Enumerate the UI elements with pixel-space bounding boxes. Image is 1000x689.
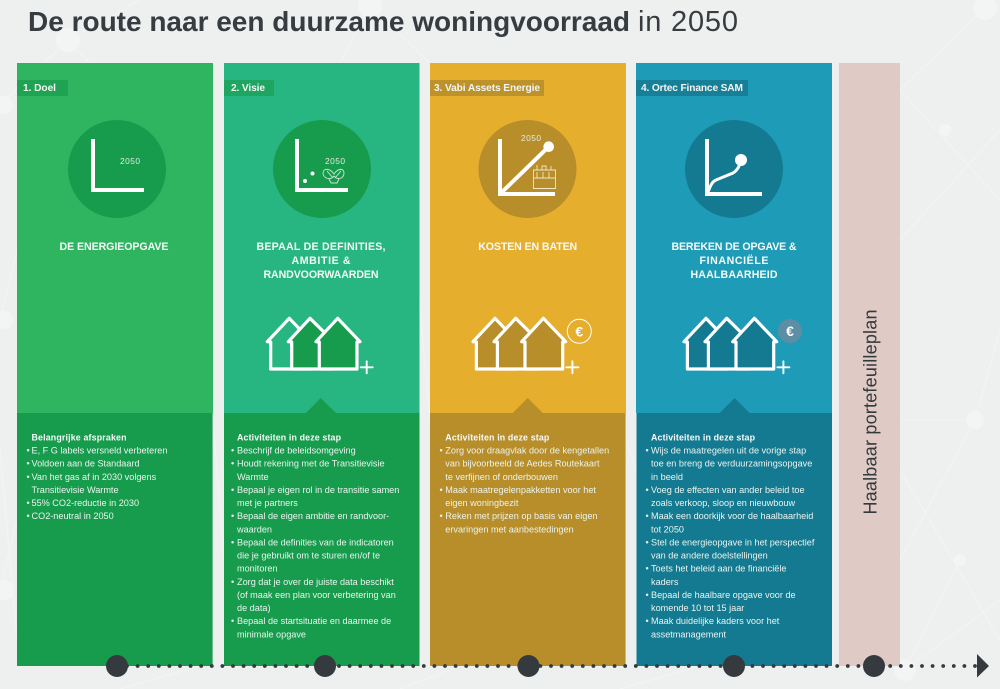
text block: activiteiten stap 4: toe en breng de verduurzamingsopgave (651, 459, 812, 469)
text block: activiteiten stap 2: Bepaal je eigen rol in de transitie samen (237, 485, 399, 495)
pointer triangle (720, 398, 750, 413)
timeline with milestones and arrow (106, 654, 989, 678)
text block: belangrijke afspraken: Van het gas af in 2030 volgens (32, 472, 157, 482)
text block: activiteiten stap 2: Bepaal de startsituatie en daarmee de (237, 616, 391, 626)
text block: belangrijke afspraken: Transitievisie Warmte (32, 485, 119, 495)
title: De route naar een duurzame woningvoorraad (28, 6, 630, 37)
heading: bereken: BEREKEN DE OPGAVE & (672, 241, 797, 253)
text block: activiteiten stap 3: Maak maatregelenpakketten voor het (445, 485, 596, 495)
icon: chart with dots and bow 2050 (273, 120, 371, 218)
text block: belangrijke afspraken (26, 432, 167, 521)
tag: 2. Visie: 2. Visie (231, 83, 265, 94)
text block: activiteiten stap 3: Reken met prijzen op basis van eigen (445, 511, 597, 521)
text block: activiteiten stap 3: te verfijnen of onderbouwen (445, 472, 558, 482)
text block: activiteiten stap 2: • (231, 511, 234, 521)
text block: activiteiten stap 4: Activiteiten in deze stap (651, 432, 756, 442)
panel: 1. Doel (17, 63, 213, 666)
text block: belangrijke afspraken: CO2-neutral in 2050 (32, 511, 114, 521)
text block: activiteiten stap 2: die je gebruikt om te sturen en/of te (237, 551, 380, 561)
text block: activiteiten stap 4: • (646, 446, 649, 456)
tag: 4. Ortec Finance SAM: 4. Ortec Finance SAM (641, 83, 743, 94)
text block: activiteiten stap 4: Stel de energieopgave in het perspectief (651, 538, 815, 548)
tag: 3. Vabi Assets Energie (430, 80, 544, 96)
heading: definities: RANDVOORWAARDEN (264, 269, 378, 281)
tag: 1. Doel (17, 80, 68, 96)
text block: activiteiten stap 4: • (646, 616, 649, 626)
text block: activiteiten stap 2: Bepaal de eigen ambitie en randvoor- (237, 511, 389, 521)
panel: 2. Visie (224, 63, 420, 666)
text block: activiteiten stap 4: Voeg de effecten van ander beleid toe (651, 485, 805, 495)
text block: activiteiten stap 4: van de andere doelstellingen (651, 551, 768, 561)
panel: Haalbaar portefeuilleplan: Haalbaar portefeuilleplan (860, 310, 880, 514)
text block: activiteiten stap 4 (646, 432, 815, 639)
text block: activiteiten stap 3: Activiteiten in deze stap (445, 432, 550, 442)
text block: activiteiten stap 2: waarden (236, 524, 272, 534)
text block: activiteiten stap 3: Zorg voor draagvlak door de kengetallen (445, 446, 609, 456)
icon: curved chart (685, 120, 783, 218)
text block: activiteiten stap 3: • (440, 446, 443, 456)
text block: activiteiten stap 2: (of maak een plan voor verbetering van (237, 590, 396, 600)
text block: belangrijke afspraken: 55% CO2-reductie in 2030 (32, 498, 139, 508)
text block: activiteiten stap 4: • (646, 590, 649, 600)
text block: activiteiten stap 2: de data) (237, 603, 270, 613)
text block: activiteiten stap 2: • (231, 577, 234, 587)
heading: bereken: FINANCIËLE (700, 254, 768, 267)
text block: activiteiten stap 2: met je partners (237, 498, 298, 508)
pointer triangle (306, 398, 336, 413)
text block: belangrijke afspraken: • (26, 498, 30, 508)
text block: activiteiten stap 4: Bepaal de haalbare opgave voor de (651, 590, 796, 600)
text block: activiteiten stap 4: in beeld (651, 472, 683, 482)
text block: activiteiten stap 2 (231, 432, 399, 639)
text block: activiteiten stap 2: Bepaal de definities van de indicatoren (237, 538, 394, 548)
text block: belangrijke afspraken: Belangrijke afspraken (32, 432, 126, 442)
pointer triangle (513, 398, 543, 413)
text block: activiteiten stap 3: ervaringen met aanbestedingen (445, 524, 574, 534)
text block: activiteiten stap 3 (440, 432, 609, 534)
text block: belangrijke afspraken: E, F G labels versneld verbeteren (32, 446, 167, 456)
text block: belangrijke afspraken: • (26, 472, 30, 482)
icon: houses plus euro badge (684, 318, 802, 373)
text block: activiteiten stap 2: Activiteiten in deze stap (237, 432, 342, 442)
icon: houses plus euro: € (575, 324, 583, 340)
text block: activiteiten stap 4: Toets het beleid aan de financiële (651, 564, 786, 574)
text block: activiteiten stap 4: komende 10 tot 15 jaar (651, 603, 744, 613)
panel: 4. Ortec Finance SAM (636, 63, 832, 666)
text block: activiteiten stap 3: van bijvoorbeeld de Aedes Routekaart (445, 459, 600, 469)
icon: houses plus euro (473, 318, 591, 373)
text block: belangrijke afspraken: Voldoen aan de Standaard (32, 459, 140, 469)
text block: activiteiten stap 2: Zorg dat je over de juiste data beschikt (237, 577, 394, 587)
text block: activiteiten stap 4: • (646, 511, 649, 521)
icon: empty chart 2050 (68, 120, 166, 218)
text block: activiteiten stap 2: monitoren (237, 564, 278, 574)
text block: activiteiten stap 4: • (646, 564, 649, 574)
title: in 2050 (638, 6, 738, 38)
text block: activiteiten stap 2: Houdt rekening met de Transitievisie (237, 459, 385, 469)
icon: rising chart with toolbox: 2050 (521, 133, 541, 143)
text block: belangrijke afspraken: • (26, 446, 30, 456)
text block: activiteiten stap 4: Wijs de maatregelen uit de vorige stap (651, 446, 806, 456)
text block: activiteiten stap 4: • (646, 538, 649, 548)
panel: Haalbaar portefeuilleplan (839, 63, 900, 666)
icon: empty chart 2050: 2050 (120, 156, 140, 166)
heading: De energieopgave: DE ENERGIEOPGAVE (60, 241, 168, 253)
text block: activiteiten stap 3: eigen woningbezit (445, 498, 519, 508)
panel: 3. Vabi Assets Energie (430, 63, 626, 666)
text block: activiteiten stap 4: assetmanagement (651, 629, 727, 639)
heading: kosten en baten: KOSTEN EN BATEN (478, 241, 577, 253)
heading: definities: AMBITIE & (292, 255, 351, 267)
text block: activiteiten stap 4: tot 2050 (651, 524, 684, 534)
tag: 1. Doel: 1. Doel (23, 83, 56, 94)
text block: activiteiten stap 2: minimale opgave (237, 629, 306, 639)
text block: activiteiten stap 3: • (440, 485, 443, 495)
text block: activiteiten stap 2: • (231, 538, 234, 548)
text block: activiteiten stap 2: Beschrijf de beleidsomgeving (237, 446, 356, 456)
text block: activiteiten stap 4: Maak duidelijke kaders voor het (651, 616, 780, 626)
heading: bereken: HAALBAARHEID (690, 269, 778, 281)
icon: rising chart with toolbox (478, 120, 576, 218)
text block: activiteiten stap 2: • (231, 485, 234, 495)
text block: activiteiten stap 4: zoals verkoop, sloop en nieuwbouw (651, 498, 795, 508)
text block: belangrijke afspraken: • (26, 511, 30, 521)
tag: 4. Ortec Finance SAM (636, 80, 748, 96)
text block: activiteiten stap 3: • (440, 511, 443, 521)
heading: bereken (672, 241, 797, 281)
icon: chart with dots and bow 2050: 2050 (325, 156, 345, 166)
icon: houses plus euro badge: € (786, 323, 794, 339)
text block: activiteiten stap 2: • (231, 446, 234, 456)
text block: activiteiten stap 2: Warmte (237, 472, 269, 482)
heading: definities: BEPAAL DE DEFINITIES, (256, 241, 386, 253)
icon: houses plus (267, 318, 373, 373)
tag: 2. Visie (224, 80, 274, 96)
text block: activiteiten stap 4: kaders (651, 577, 679, 587)
tag: 3. Vabi Assets Energie: 3. Vabi Assets Energie (434, 83, 540, 94)
heading: definities (256, 241, 386, 281)
text block: activiteiten stap 2: • (231, 616, 234, 626)
text block: activiteiten stap 2: • (231, 459, 234, 469)
text block: activiteiten stap 4: Maak een doorkijk voor de haalbaarheid (651, 511, 813, 521)
text block: activiteiten stap 4: • (646, 485, 649, 495)
text block: belangrijke afspraken: • (26, 459, 30, 469)
